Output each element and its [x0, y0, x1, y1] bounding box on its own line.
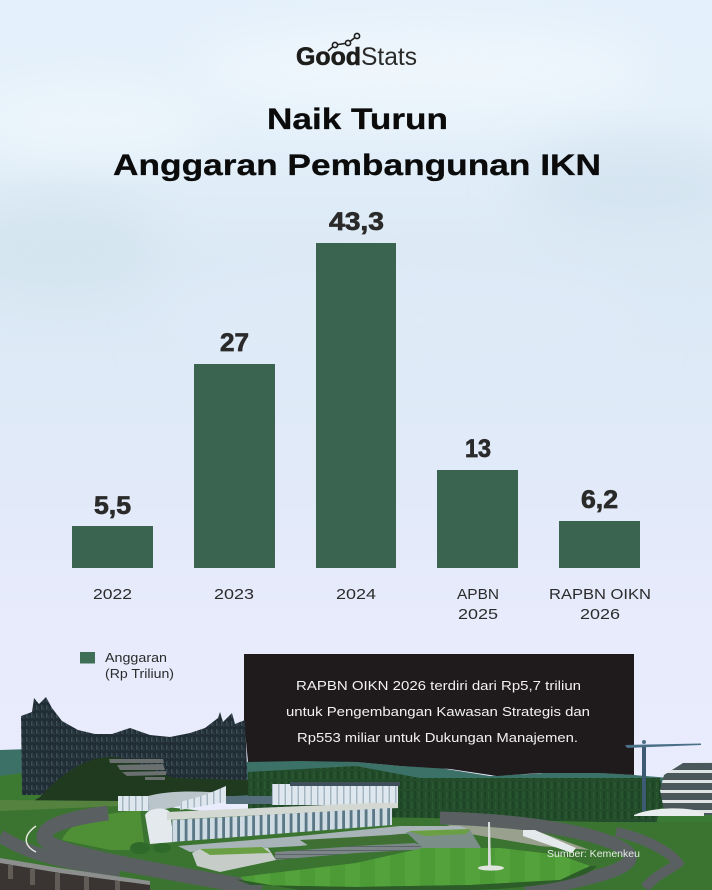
title	[113, 103, 601, 182]
stadium lawn	[240, 848, 590, 887]
value labels: 5,5	[94, 492, 131, 520]
legend: (Rp Triliun)	[105, 666, 174, 681]
bars	[72, 243, 640, 568]
logo: GoodStats: Good	[296, 43, 361, 71]
category labels: 2023	[214, 586, 254, 603]
title: Anggaran Pembangunan IKN	[113, 149, 601, 182]
source note: Sumber: Kemenkeu	[547, 848, 640, 860]
callout: RAPBN OIKN 2026 note: Rp553 miliar untuk Dukungan Manajemen.	[297, 730, 578, 745]
green-roof pavilion	[192, 848, 276, 872]
callout: RAPBN OIKN 2026 note: untuk Pengembangan Kawasan Strategis dan	[286, 704, 590, 719]
category labels: 2022	[93, 586, 132, 603]
landscape photo: crane	[625, 740, 701, 811]
landscape photo: distant hills and forest	[0, 749, 712, 890]
value labels: 13	[465, 435, 491, 463]
landscape photo: hotel building	[634, 762, 712, 816]
landscape photo: garuda palace	[21, 697, 248, 805]
category labels: APBN	[457, 586, 499, 603]
landscape photo: ceremonial complex	[118, 782, 597, 890]
value labels: 27	[220, 329, 249, 357]
legend: Anggaran	[105, 650, 167, 665]
right curved roads	[440, 818, 630, 890]
value labels	[94, 208, 618, 520]
category labels: 2025	[458, 606, 498, 623]
logo: GoodStats	[296, 33, 417, 71]
category labels: RAPBN OIKN	[549, 586, 651, 603]
callout: RAPBN OIKN 2026 note	[244, 654, 634, 776]
flagpole	[488, 822, 491, 866]
category labels: 2026	[580, 606, 620, 623]
left curved roads	[44, 813, 262, 889]
logo: GoodStats: Stats	[361, 43, 417, 71]
category labels: 2024	[336, 586, 376, 603]
plaza	[440, 822, 590, 850]
white curved wall	[523, 830, 576, 853]
shrubs	[153, 843, 171, 853]
value labels: 6,2	[581, 486, 618, 514]
callout: RAPBN OIKN 2026 note: RAPBN OIKN 2026 terdiri dari Rp5,7 triliun	[296, 678, 581, 693]
title: Naik Turun	[267, 103, 448, 136]
bar chart	[72, 208, 651, 623]
value labels: 43,3	[329, 208, 384, 236]
legend	[80, 650, 174, 681]
landscape photo: roads and ground	[0, 800, 712, 890]
category labels	[93, 586, 651, 623]
icon: rising line chart	[328, 33, 360, 51]
bridge	[0, 862, 150, 890]
